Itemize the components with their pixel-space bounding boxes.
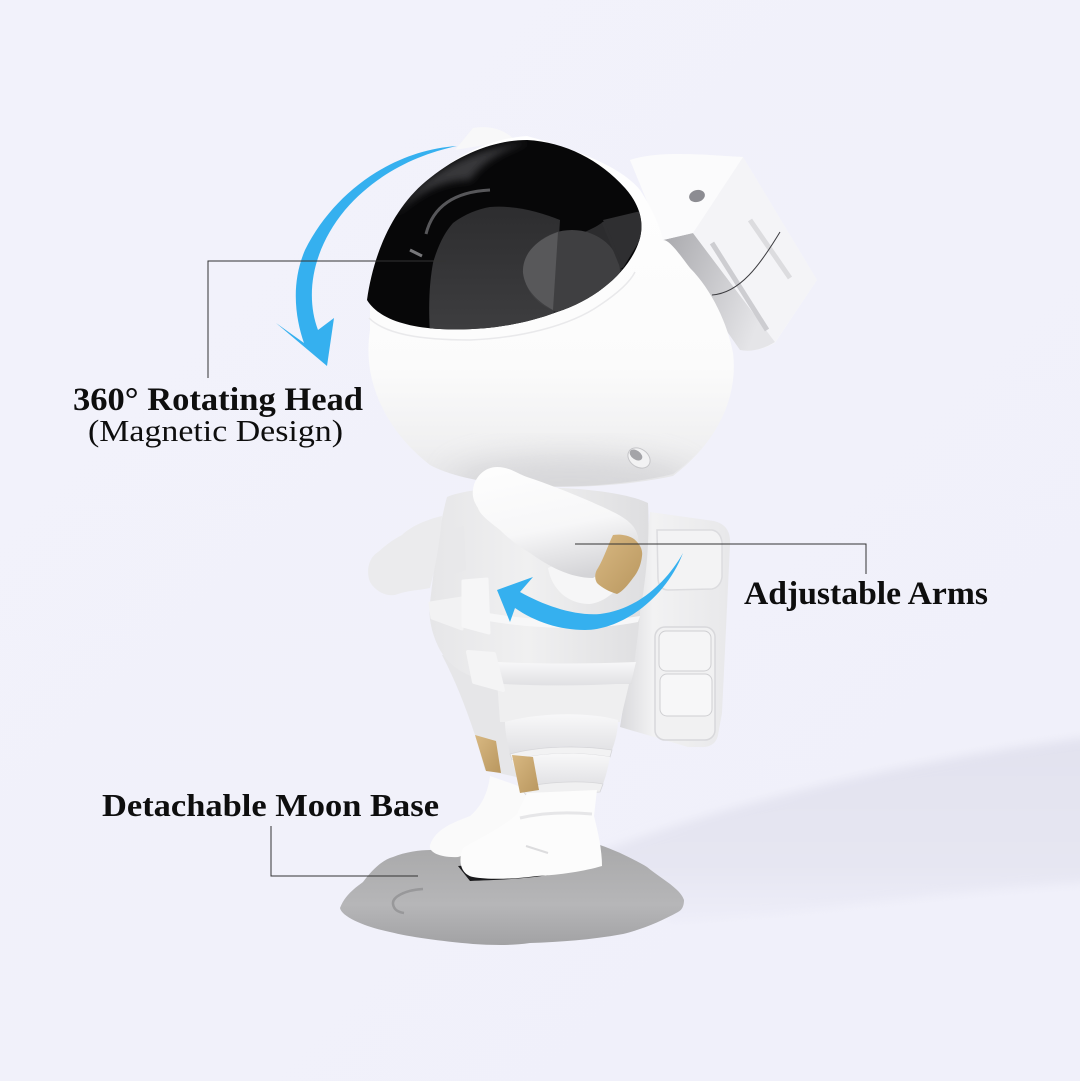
shoulder cup bbox=[548, 550, 630, 604]
label: 360 rotating head: 360° Rotating Head bbox=[73, 382, 363, 418]
backpack module bbox=[630, 154, 817, 351]
moon base bbox=[340, 845, 684, 945]
tan shoulder joint bbox=[595, 535, 642, 594]
front boot bbox=[460, 790, 602, 879]
helmet shell bbox=[367, 136, 792, 487]
leader line: base bbox=[271, 826, 418, 876]
chest detail bbox=[448, 526, 466, 576]
ear hole bbox=[624, 444, 654, 472]
top gloss bbox=[400, 141, 522, 210]
sublabel: magnetic design: (Magnetic Design) bbox=[88, 413, 343, 448]
backpack lower bbox=[620, 512, 730, 747]
arrow: arm movement bbox=[497, 553, 683, 630]
lower belt bbox=[497, 662, 636, 685]
floor shadow bbox=[600, 736, 1080, 924]
label: adjustable arms: Adjustable Arms bbox=[744, 576, 988, 612]
label: detachable moon base: Detachable Moon Base bbox=[102, 787, 439, 823]
visor bbox=[367, 140, 642, 330]
chin shading bbox=[462, 452, 674, 486]
leader line: arms bbox=[575, 544, 866, 574]
rear knee patch bbox=[475, 735, 501, 773]
interior grey region bbox=[429, 207, 560, 335]
arc highlight bbox=[426, 190, 490, 234]
helmet nub bbox=[455, 127, 515, 150]
front knee patch bbox=[512, 755, 539, 793]
right arm bbox=[473, 467, 642, 604]
callout: rotating head bbox=[73, 261, 446, 448]
callout: moon base bbox=[102, 787, 439, 876]
helmet body bbox=[368, 136, 734, 487]
astronaut figure bbox=[340, 127, 817, 945]
callout: adjustable arms bbox=[575, 544, 988, 612]
belt buckle bbox=[468, 652, 503, 690]
upper belt bbox=[488, 613, 640, 628]
chest strap left bbox=[430, 598, 462, 629]
visor rim bbox=[369, 272, 635, 340]
rear boot bbox=[430, 776, 530, 857]
soft circle reflection bbox=[542, 230, 620, 312]
leader line: head bbox=[208, 261, 446, 378]
front leg bbox=[497, 680, 630, 796]
rear leg bbox=[442, 650, 540, 780]
dark reflection edge bbox=[603, 222, 622, 268]
left arm bbox=[368, 516, 442, 595]
torso bbox=[429, 487, 649, 690]
arrow: head rotation bbox=[276, 146, 457, 366]
chest strap right bbox=[463, 579, 489, 633]
right reflection bbox=[603, 212, 642, 268]
